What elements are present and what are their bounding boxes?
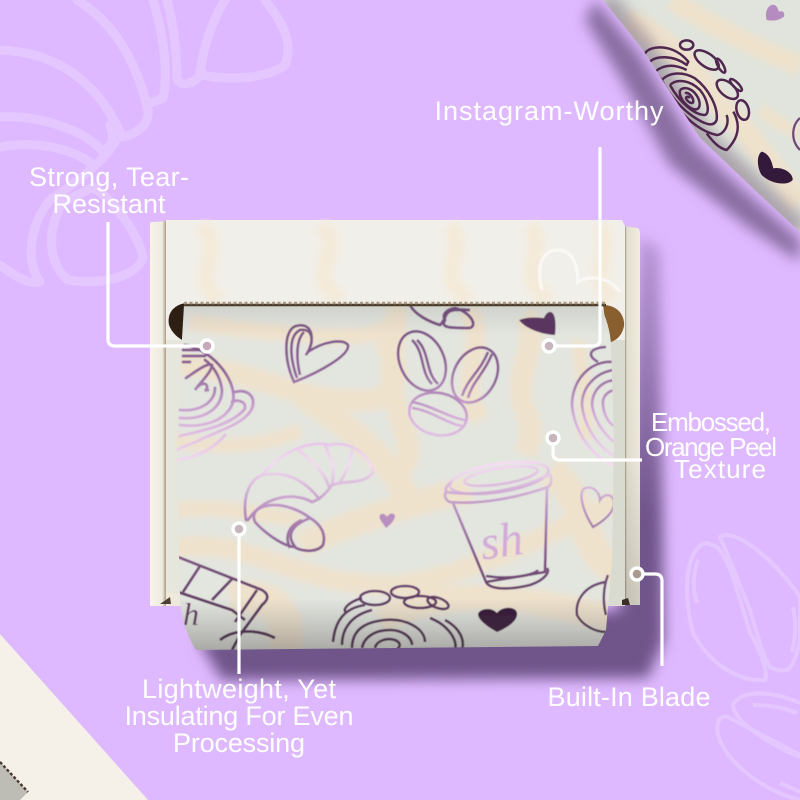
icon: small pink heart on corner roll (766, 5, 784, 21)
chocolate bar icon (178, 557, 275, 650)
label text: Built-In Blade: Built-In Blade (548, 682, 710, 712)
callout: Built-In Blade (548, 568, 710, 712)
marker dot (201, 340, 213, 352)
paper roll (170, 300, 620, 655)
label text: Strong, Tear-Resistant: Strong, Tear- (29, 162, 189, 192)
background icon: faint croissant (0, 0, 288, 282)
box right side shading (624, 300, 640, 605)
coffee beans icon (396, 330, 500, 437)
faint heart on lid (540, 250, 620, 292)
connector line (556, 147, 600, 346)
callout: Embossed, Orange Peel Texture (547, 407, 777, 484)
connector line (108, 222, 201, 346)
bottom cinnamon roll icon (333, 586, 463, 650)
label text: Lightweight, Yet Insulating For Even Processing: Insulating For Even (124, 701, 354, 731)
marker dot (547, 432, 559, 444)
marker dot (631, 568, 643, 580)
paper shading (170, 300, 620, 655)
callout: Instagram-Worthy (434, 96, 664, 352)
heart fragments at slot icon (410, 305, 473, 328)
foil roll top-right corner (585, 0, 800, 262)
connector line (237, 535, 241, 674)
box lower side strips (166, 340, 625, 606)
box body (166, 220, 625, 606)
left slot opening (169, 303, 186, 341)
label text: Lightweight, Yet Insulating For Even Processing: Processing (173, 728, 305, 758)
box lid pattern (200, 225, 612, 300)
sh script on cup: sh (477, 512, 526, 571)
icon: dark heart on corner roll (758, 152, 793, 184)
box drop shadow (198, 236, 664, 680)
marker dot (543, 340, 555, 352)
label text: Strong, Tear-Resistant: Resistant (52, 189, 166, 219)
small heart icon (379, 513, 395, 528)
coffee cup icon (445, 456, 551, 588)
box (150, 220, 640, 606)
croissant icon (245, 444, 373, 551)
connector line (553, 444, 642, 460)
outline heart icon right (582, 487, 614, 527)
slot serrated edge (184, 303, 606, 305)
callout: Strong, Tear-Resistant (29, 162, 213, 352)
right edge cookie icon (577, 575, 608, 632)
large heart icon (286, 325, 348, 382)
callout: Lightweight, Yet Insulating For Even Processing (124, 523, 354, 758)
latte cup icon (178, 345, 253, 460)
marker dot (233, 523, 245, 535)
label text: Lightweight, Yet Insulating For Even Processing: Lightweight, Yet (142, 674, 336, 704)
label text: Instagram-Worthy: Instagram-Worthy (434, 96, 664, 126)
label text: Embossed, Orange Peel Texture: Orange Peel (645, 432, 777, 462)
paper swirl bands (175, 305, 620, 650)
paper side box folds (160, 590, 630, 606)
label text: Embossed, Orange Peel Texture: Embossed, (651, 407, 771, 437)
label text: Embossed, Orange Peel Texture: Texture (674, 454, 766, 484)
dark purple heart icon (519, 312, 556, 335)
right slot opening (603, 305, 624, 343)
icon: cinnamon roll on corner roll (645, 40, 751, 150)
black heart icon (478, 608, 517, 632)
foil box bottom-left corner (0, 634, 148, 800)
box left side flap (150, 221, 167, 606)
connector line (643, 574, 662, 666)
background icon: faint coffee beans (687, 535, 800, 800)
cinnamon roll icon right (572, 347, 614, 466)
box right side flap (624, 226, 640, 605)
icon: partial outline on corner roll edge (793, 118, 800, 150)
h script on bar: h (183, 596, 199, 632)
